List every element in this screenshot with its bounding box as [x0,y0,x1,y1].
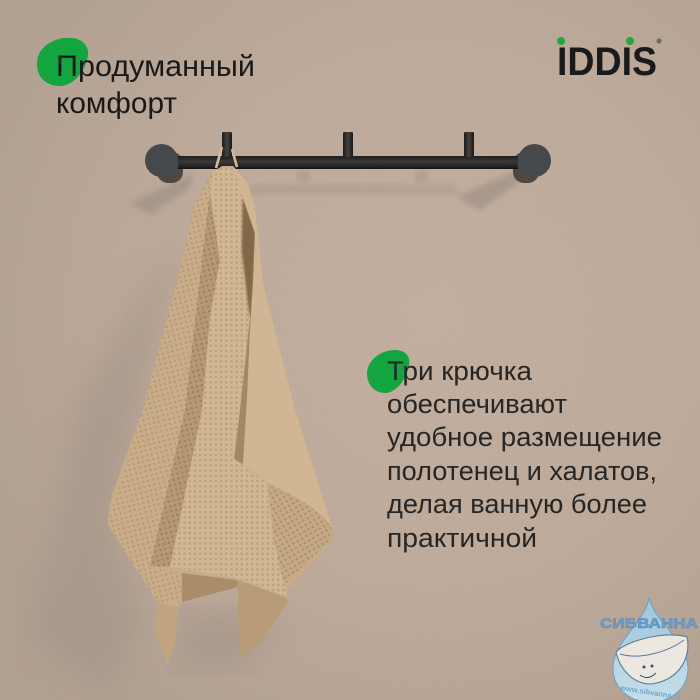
rear towel silhouette [107,166,333,664]
horizontal bar [178,156,518,169]
right wall mount [513,144,551,183]
towel and rail cast shadows [30,170,525,690]
title [37,38,255,120]
hanging waffle towel [107,147,333,664]
body callout [367,350,662,553]
iddis logo [557,37,662,84]
callout line 6: практичной [387,523,537,553]
callout green blob [367,350,409,393]
callout line 2: обеспечивают [387,389,567,419]
title line 2: комфорт [56,87,177,120]
title green blob [37,38,88,86]
smiling bathtub [616,635,688,684]
left wall mount [145,144,183,183]
callout line 5: делая ванную более [387,489,647,519]
sibvanna watermark [600,598,698,700]
wall rail with three hooks [145,132,551,183]
centre underside [182,573,238,602]
callout line 1: Три крючка [387,356,533,386]
hook 1 [222,132,232,157]
right tail [238,580,287,660]
left waffle side [107,172,213,603]
watermark name: СИБВАННА [600,615,698,631]
water drop [613,598,688,700]
logo wordmark: IDDIS [557,40,657,84]
towel loop [216,147,237,168]
logo dot left [557,37,565,45]
right underside waffle [268,483,333,585]
logo dot right [626,37,634,45]
right shaded gap [234,198,255,464]
front waffle panel [170,168,287,597]
callout line 3: удобное размещение [387,422,662,452]
hook 2 [343,132,353,157]
title line 1: Продуманный [56,50,255,83]
dark inner fold [150,193,220,567]
registered mark [656,38,662,44]
right plain flap [233,166,333,530]
callout line 4: полотенец и халатов, [387,456,657,486]
left tail [155,603,178,664]
hook 3 [464,132,474,157]
